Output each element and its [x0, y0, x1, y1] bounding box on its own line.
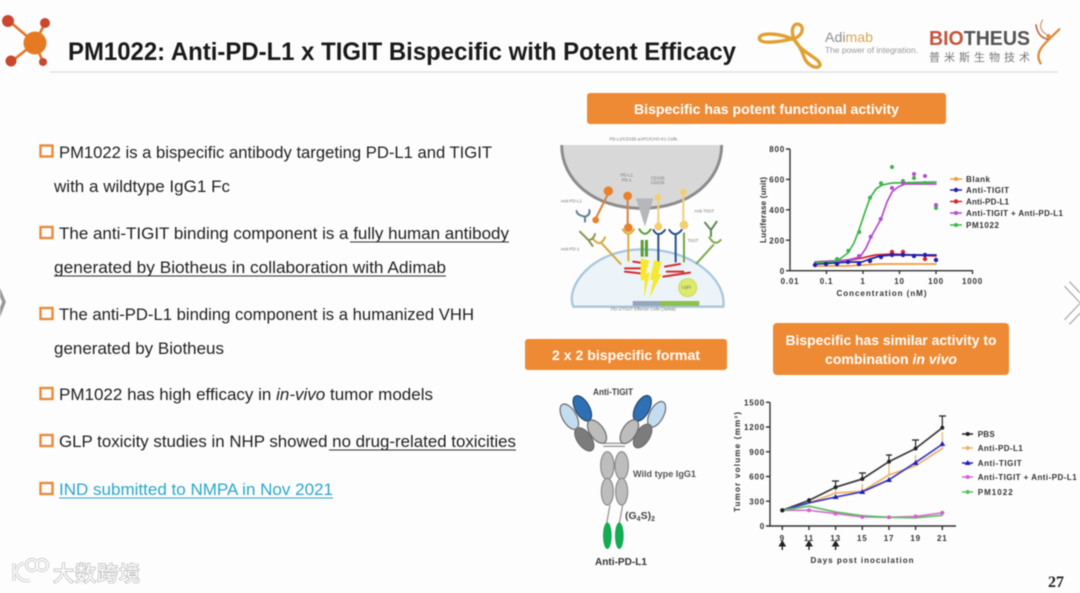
bullet 4: PM1022 has high efficacy in in-vivo tumor models [59, 385, 433, 404]
axes [766, 402, 956, 530]
logo: Adimab: Adimab [825, 29, 873, 45]
curves [815, 182, 936, 266]
arrow: next slide chevron [1067, 284, 1080, 322]
axis labels [733, 398, 948, 565]
axis labels: 600 [749, 472, 765, 482]
diagram: antibody structure: Anti-TIGIT [593, 387, 633, 398]
diagram: antibody structure: (G [625, 510, 637, 522]
title: PM1022: Anti-PD-L1 x TIGIT Bispecific with Potent Efficacy [68, 38, 736, 66]
legend: PM1022 [966, 221, 1000, 230]
logo: Adimab: The power of integration. [825, 46, 918, 55]
line chart: tumor volume [733, 398, 1077, 565]
axis labels: Tumor volume (mm³) [733, 412, 742, 512]
diagram: mechanism of action: Anti-PD-1 [561, 247, 580, 252]
axis labels: 800 [769, 145, 785, 154]
legend: PBS [978, 430, 995, 439]
bullet 5: GLP toxicity studies in NHP showed no drug-related toxicities [59, 432, 516, 451]
legend: Blank [966, 175, 991, 184]
bullet 6: IND submitted to NMPA in Nov 2021 [59, 480, 333, 499]
bullet 3: The anti-PD-L1 binding component is a humanized VHH [59, 305, 474, 324]
axis labels: 1200 [744, 423, 765, 432]
bullet 1: with a wildtype IgG1 Fc [53, 177, 230, 196]
axis labels: 300 [749, 498, 765, 506]
axis labels: 11 [804, 534, 814, 543]
axis labels: 1 [860, 277, 866, 286]
axis labels: 10 [894, 277, 905, 286]
axis labels: Concentration (nM) [836, 289, 927, 298]
legend: Anti-TIGIT + Anti-PD-L1 [966, 209, 1064, 218]
diagram: mechanism of action: Anti-PD-L1 [561, 199, 582, 204]
axis labels: 200 [769, 236, 785, 246]
legend: Anti-TIGIT + Anti-PD-L1 [978, 473, 1077, 482]
axis labels: Days post inoculation [810, 556, 914, 565]
axis labels: 19 [910, 534, 921, 543]
bullet 1: PM1022 is a bispecific antibody targeting PD-L1 and TIGIT [59, 143, 492, 162]
bullet 2: The anti-TIGIT binding component is a fully human antibody [59, 224, 509, 243]
logo: Biotheus: BIOTHEUS [929, 28, 1030, 50]
axis labels: Luciferase (unit) [759, 177, 768, 243]
axis labels: 900 [749, 448, 765, 457]
bullet 3 [40, 305, 474, 358]
bullet 3: generated by Biotheus [54, 339, 224, 358]
heading: similar activity to combination: Bispecific has similar activity to [786, 332, 996, 348]
axis labels: 1000 [962, 277, 983, 286]
diagram: antibody structure: 4 [637, 516, 641, 523]
heading: functional activity [587, 93, 946, 124]
axis labels: 21 [937, 534, 948, 543]
heading: 2 x 2 bispecific format: 2 x 2 bispecific format [552, 347, 700, 363]
diagram: mechanism of action: PD-1/TIGIT Effector Cells (Jurkat) [611, 306, 676, 311]
legend: Anti-PD-L1 [978, 444, 1023, 453]
logo: Biotheus [929, 20, 1059, 64]
legend: Anti-TIGIT [978, 459, 1022, 468]
watermark [14, 560, 140, 586]
diagram: antibody structure: S) [641, 510, 651, 522]
heading: 2 x 2 bispecific format [525, 339, 727, 370]
axis labels: 1500 [744, 398, 765, 408]
axis labels: 15 [857, 534, 868, 543]
axis labels: 600 [769, 176, 785, 184]
diagram: mechanism of action: CD155 [651, 175, 665, 180]
diagram: antibody structure: Anti-PD-L1 [595, 556, 647, 568]
bullet 2: generated by Biotheus in collaboration with Adimab [54, 258, 446, 277]
diagram: antibody structure: 2 [651, 516, 655, 523]
diagram: mechanism of action [561, 137, 724, 311]
watermark: 大数跨境 [53, 563, 140, 586]
diagram: antibody structure [556, 387, 697, 568]
heading: similar activity to combination [773, 323, 1009, 375]
logo: Adimab [759, 24, 918, 67]
error bars [809, 416, 946, 500]
legend [950, 175, 1064, 230]
axis labels: 17 [884, 534, 894, 543]
arrow: previous slide chevron [0, 285, 4, 320]
legend: Anti-PD-L1 [966, 198, 1010, 206]
bullet 1 [40, 143, 492, 196]
heading: functional activity: Bispecific has potent functional activity [634, 101, 899, 117]
heading: similar activity to combination: combination in vivo [825, 351, 957, 367]
icon: orange molecule logo [2, 15, 50, 66]
axis labels: 0.01 [781, 277, 799, 286]
axis labels: 13 [830, 534, 841, 543]
axis labels: 9 [780, 534, 785, 543]
icon: dosing arrows [779, 541, 839, 550]
diagram: mechanism of action: PD-L1/CD155 aAPC/CHO-K1 Cells [609, 137, 677, 142]
diagram: antibody structure: Wild type IgG1 [633, 469, 697, 480]
line chart: luciferase vs concentration [759, 145, 1064, 298]
data points [780, 426, 945, 519]
data points [813, 165, 938, 267]
legend: PM1022 [978, 488, 1013, 497]
panel: key points text [40, 143, 516, 499]
legend [962, 430, 1077, 497]
axis labels: 100 [928, 277, 944, 286]
diagram: mechanism of action: Anti-TIGIT [694, 209, 715, 214]
curves [782, 428, 942, 518]
axis labels: 400 [769, 206, 785, 215]
legend: Anti-TIGIT [966, 186, 1009, 195]
axis labels: 0 [780, 267, 785, 276]
diagram: mechanism of action: PD-L1 [621, 173, 633, 178]
axis labels: 0 [760, 522, 765, 531]
axis labels: 0.1 [820, 277, 833, 286]
logo: Biotheus: 普米斯生物技术 [929, 50, 1030, 64]
diagram: mechanism of action: Light [682, 284, 692, 289]
page number: 27 [1048, 574, 1064, 591]
diagram: mechanism of action: TIGIT [687, 238, 699, 243]
bullet 2 [40, 224, 509, 277]
axes [786, 149, 973, 274]
axis labels [759, 145, 983, 298]
diagram: mechanism of action: CD226 [651, 180, 665, 185]
diagram: mechanism of action: PD-1 [622, 178, 632, 183]
